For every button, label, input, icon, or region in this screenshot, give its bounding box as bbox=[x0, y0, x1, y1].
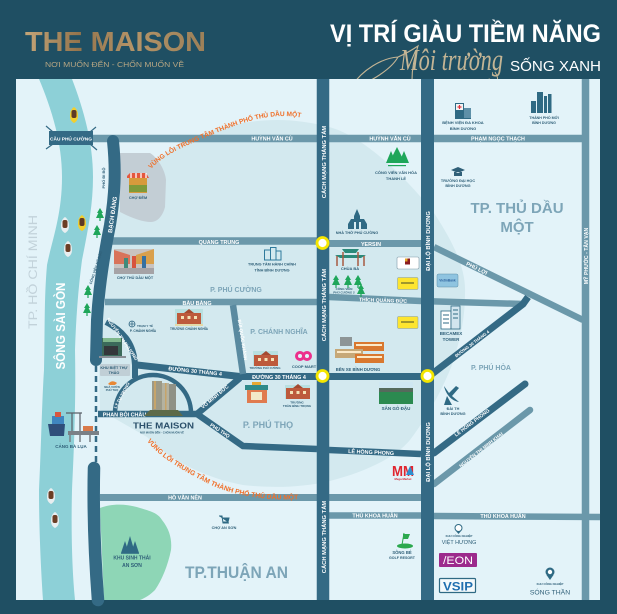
small dark labels: ĐÀI TH bbox=[447, 406, 460, 411]
icon: location pin Việt Hương bbox=[455, 524, 462, 534]
junction markers bbox=[317, 238, 433, 382]
small dark labels: GOLF RESORT bbox=[389, 556, 416, 560]
small dark labels: TRƯỜNG CHÁNH NGHĨA bbox=[170, 326, 209, 331]
logo: The Maison: THE MAISON bbox=[25, 26, 206, 57]
road labels bbox=[103, 126, 590, 573]
river names bbox=[27, 215, 68, 370]
road labels: QUANG TRUNG bbox=[199, 240, 239, 246]
bridge: Cầu Phú Cường bbox=[46, 126, 97, 150]
main roads bbox=[94, 79, 528, 600]
title: SỐNG XANH bbox=[510, 57, 601, 75]
bridge: Cầu Phú Cường: CẦU PHÚ CƯỜNG bbox=[50, 134, 92, 142]
road labels: VÕ MINH ĐỨC bbox=[200, 383, 231, 411]
boats and trees along the river bbox=[47, 107, 104, 528]
icon: trạm y tế bbox=[129, 321, 135, 327]
logo: blue badge: VietinBank bbox=[439, 278, 456, 282]
road labels: THÍCH QUẢNG ĐỨC bbox=[359, 295, 408, 305]
road labels: BẠCH ĐẰNG bbox=[106, 196, 119, 233]
logos: yellow badges bbox=[398, 278, 418, 328]
small dark labels: AN SƠN bbox=[122, 563, 142, 569]
road labels: LÝ TỰ TRỌNG bbox=[113, 381, 131, 409]
small dark labels: THÀNH PHỐ MỚI bbox=[529, 115, 559, 120]
area names: TP. THỦ DẦU bbox=[470, 199, 564, 217]
small dark labels: BẾN XE BÌNH DƯƠNG bbox=[336, 367, 380, 372]
icon: biệt thự shop bbox=[99, 338, 126, 358]
icon: trung tâm hành chính bbox=[264, 248, 281, 260]
icon: Sân Gò Đậu stadium bbox=[379, 382, 413, 404]
small dark labels: KHU SINH THÁI bbox=[113, 554, 151, 562]
small dark labels: BÌNH DƯƠNG bbox=[532, 120, 556, 125]
area names: TP.THUẬN AN bbox=[185, 563, 288, 582]
icon: cart Chợ An Sơn bbox=[219, 516, 229, 523]
area names: P. PHÚ CƯỜNG bbox=[210, 285, 262, 294]
road labels: CÁCH MẠNG THÁNG TÁM bbox=[321, 269, 328, 341]
icon: golf flag bbox=[397, 533, 413, 548]
logo: MM Mega Market: Mega Market bbox=[395, 477, 412, 481]
road labels: LÊ HỒNG PHONG bbox=[452, 406, 491, 438]
small dark labels: TRƯỜNG bbox=[290, 400, 304, 404]
road labels: NGUYỄN TRI PHƯƠNG bbox=[106, 316, 140, 362]
road labels: CÁCH MẠNG THÁNG TÁM bbox=[321, 126, 328, 198]
icon: An Sơn pines bbox=[121, 536, 139, 554]
small dark labels: PHỐ ĐI BỘ bbox=[101, 168, 106, 188]
small dark labels: TOWER bbox=[443, 337, 460, 342]
label box: khu biệt thự bbox=[100, 364, 130, 376]
road labels: PHÚ LỢI bbox=[465, 261, 489, 277]
small dark labels bbox=[55, 115, 570, 596]
icon: trường Chánh Nghĩa bbox=[175, 309, 203, 326]
small dark labels: CHỢ AN SƠN bbox=[212, 526, 237, 530]
road labels: PHÚ THỌ bbox=[208, 422, 231, 440]
title bbox=[330, 19, 601, 86]
river: Sông Sài Gòn bbox=[39, 79, 93, 600]
central zone bbox=[98, 120, 465, 487]
small dark labels: CHỢ THỦ DẦU MỘT bbox=[117, 275, 154, 280]
small dark labels: P. CHÁNH NGHĨA bbox=[130, 328, 157, 333]
project name: The Maison: THE MAISON bbox=[133, 422, 194, 430]
road labels: PHẠM NGỌC THẠCH bbox=[471, 136, 525, 142]
river names: SÔNG SÀI GÒN bbox=[53, 282, 68, 370]
road labels: THỦ KHOA HUÂN bbox=[352, 512, 398, 520]
icon: church bbox=[348, 209, 367, 229]
road labels: ĐƯỜNG 30 THÁNG 4 bbox=[168, 364, 222, 378]
small dark labels: BỆNH VIỆN ĐA KHOA bbox=[442, 120, 484, 125]
tower: The Maison bbox=[144, 381, 183, 416]
logo: blue badge bbox=[437, 274, 458, 287]
icon: hospital bbox=[455, 103, 471, 119]
road labels: YERSIN bbox=[361, 242, 381, 248]
icon: new city bbox=[531, 92, 552, 113]
icon: chợ Thủ Dầu Một bbox=[114, 249, 154, 274]
small dark labels: CẢNG BÀ LỤA bbox=[55, 443, 87, 449]
area names: P. PHÚ THỌ bbox=[243, 419, 293, 430]
logo: The Maison: NƠI MUỐN ĐẾN - CHỐN MUỐN VỀ bbox=[45, 59, 184, 69]
small dark labels: TRƯỜNG ĐẠI HỌC bbox=[441, 178, 475, 183]
icon: Cảng Bà Lụa bbox=[48, 412, 99, 442]
icon: location pin Sóng Thần bbox=[546, 568, 554, 580]
small dark labels: KHU CÔNG NGHIỆP bbox=[537, 581, 563, 586]
road labels: NGUYỄN THỊ MINH KHAI bbox=[458, 430, 504, 468]
title: VỊ TRÍ GIÀU TIỀM NĂNG bbox=[330, 19, 601, 48]
small dark labels: KHU CÔNG NGHIỆP bbox=[446, 533, 472, 538]
icon: trường Phú Thọ bbox=[285, 384, 310, 399]
small dark labels: CHÙA BÀ bbox=[341, 266, 359, 271]
small dark labels: BECAMEX bbox=[440, 331, 462, 336]
road labels: THỦ KHOA HUÂN bbox=[480, 513, 526, 520]
road labels: ĐẠI LỘ BÌNH DƯƠNG bbox=[424, 211, 432, 271]
small dark labels: COOP MART bbox=[292, 364, 317, 369]
road labels: CÁCH MẠNG THÁNG TÁM bbox=[321, 501, 328, 573]
icon: Becamex Tower bbox=[441, 306, 460, 329]
small dark labels: TRUNG TÂM HÀNH CHÍNH bbox=[248, 262, 296, 266]
area names: MỘT bbox=[500, 218, 534, 236]
road labels: HUỲNH VĂN CÙ bbox=[251, 136, 293, 142]
small dark labels: NHÀ THỜ PHÚ CƯỜNG bbox=[336, 230, 378, 235]
small dark labels: TỈNH BÌNH DƯƠNG bbox=[254, 268, 290, 272]
small dark labels: KHU BIỆT THỰ bbox=[100, 365, 128, 370]
icon: orange roof bbox=[108, 381, 117, 385]
icon: chợ đêm stall bbox=[127, 173, 149, 193]
road labels: MỸ PHƯỚC - TÂN VẠN bbox=[582, 227, 590, 284]
small dark labels: VIỆT HƯƠNG bbox=[442, 538, 476, 546]
small dark labels: BÌNH DƯƠNG bbox=[440, 411, 466, 416]
logo: white badge bbox=[397, 257, 419, 269]
logo: AEON bbox=[439, 553, 477, 567]
road labels: ĐƯỜNG 30 THÁNG 4 bbox=[252, 373, 306, 381]
icon: Coop Mart bbox=[295, 351, 312, 361]
icon: trường Phú Cường bbox=[253, 351, 278, 366]
small dark labels: BÌNH DƯƠNG bbox=[445, 183, 471, 188]
icon: graduation cap bbox=[451, 167, 465, 176]
small dark labels: CHỢ ĐÊM bbox=[129, 195, 147, 200]
small dark labels: TRƯỜNG PHÚ CƯỜNG bbox=[249, 365, 281, 370]
small dark labels: SÓNG THẦN bbox=[530, 586, 570, 596]
road labels: ĐƯỜNG 30 THÁNG 4 bbox=[454, 329, 491, 358]
small dark labels: CÔNG VIÊN VĂN HÓA bbox=[375, 170, 417, 175]
park: An Sơn bbox=[100, 505, 171, 600]
small dark labels: CÔNG VIÊN bbox=[336, 286, 352, 291]
small dark labels: PHÚ THỌ bbox=[106, 387, 119, 392]
area names: P. PHÚ HÒA bbox=[471, 363, 511, 372]
icon: Chùa Bà gate bbox=[335, 249, 366, 266]
orange arc label: top: VÙNG LÕI TRUNG TÂM THÀNH PHỐ THỦ DẦU MỘT bbox=[148, 110, 302, 168]
small dark labels: TRẦN BÌNH TRỌNG bbox=[283, 403, 312, 408]
road labels: PHAN BỘI CHÂU bbox=[103, 410, 146, 418]
small dark labels: BÌNH DƯƠNG bbox=[450, 126, 476, 131]
logo: AEON: /EON bbox=[443, 555, 473, 567]
small dark labels: CÔNG VIÊN MỸ ĐỨC bbox=[88, 250, 103, 285]
road labels: HỒ VĂN NÊN bbox=[168, 494, 202, 502]
road labels: BÀU BÀNG bbox=[182, 300, 212, 307]
road labels: BÙI QUỐC KHÁNH bbox=[237, 319, 249, 361]
icon: park trees Phú Cường bbox=[332, 275, 365, 297]
road labels: ĐẠI LỘ BÌNH DƯƠNG bbox=[424, 422, 432, 482]
small dark labels: THANH LỄ bbox=[386, 176, 406, 181]
area: Chợ Đêm bbox=[120, 153, 166, 222]
road labels: HUỲNH VĂN CÙ bbox=[369, 136, 411, 142]
small dark labels: SÂN GÒ ĐẬU bbox=[382, 404, 410, 411]
small dark labels: TRẠM Y TẾ bbox=[137, 323, 153, 328]
icon: satellite dish bbox=[444, 386, 459, 405]
area names: P. CHÁNH NGHĨA bbox=[250, 327, 308, 336]
river names: TP. HỒ CHÍ MINH bbox=[27, 215, 40, 329]
small dark labels: THẢO bbox=[109, 370, 119, 375]
secondary roads bbox=[92, 79, 600, 600]
title: Môi trường bbox=[399, 42, 503, 77]
small dark labels: NHÀ VƯỜN bbox=[104, 384, 120, 389]
road labels: LÊ HỒNG PHONG bbox=[348, 447, 394, 457]
area names bbox=[185, 199, 564, 582]
icon: Bến xe buses bbox=[335, 337, 384, 363]
small dark labels: SÔNG BÉ bbox=[392, 550, 412, 555]
small dark labels: NƠI MUỐN ĐẾN - CHỐN MUỐN VỀ bbox=[140, 430, 184, 434]
logo: VSIP: VSIP bbox=[443, 580, 473, 594]
icon: Phú Thọ shop bbox=[245, 382, 268, 403]
small dark labels: PHÚ CƯỜNG 2 bbox=[333, 290, 355, 294]
logo: MM Mega Market: MM bbox=[392, 463, 414, 480]
icon: park Thanh Lễ bbox=[386, 147, 409, 166]
orange arc label: bottom: VÙNG LÕI TRUNG TÂM THÀNH PHỐ THỦ DẦU MỘT bbox=[148, 438, 298, 501]
